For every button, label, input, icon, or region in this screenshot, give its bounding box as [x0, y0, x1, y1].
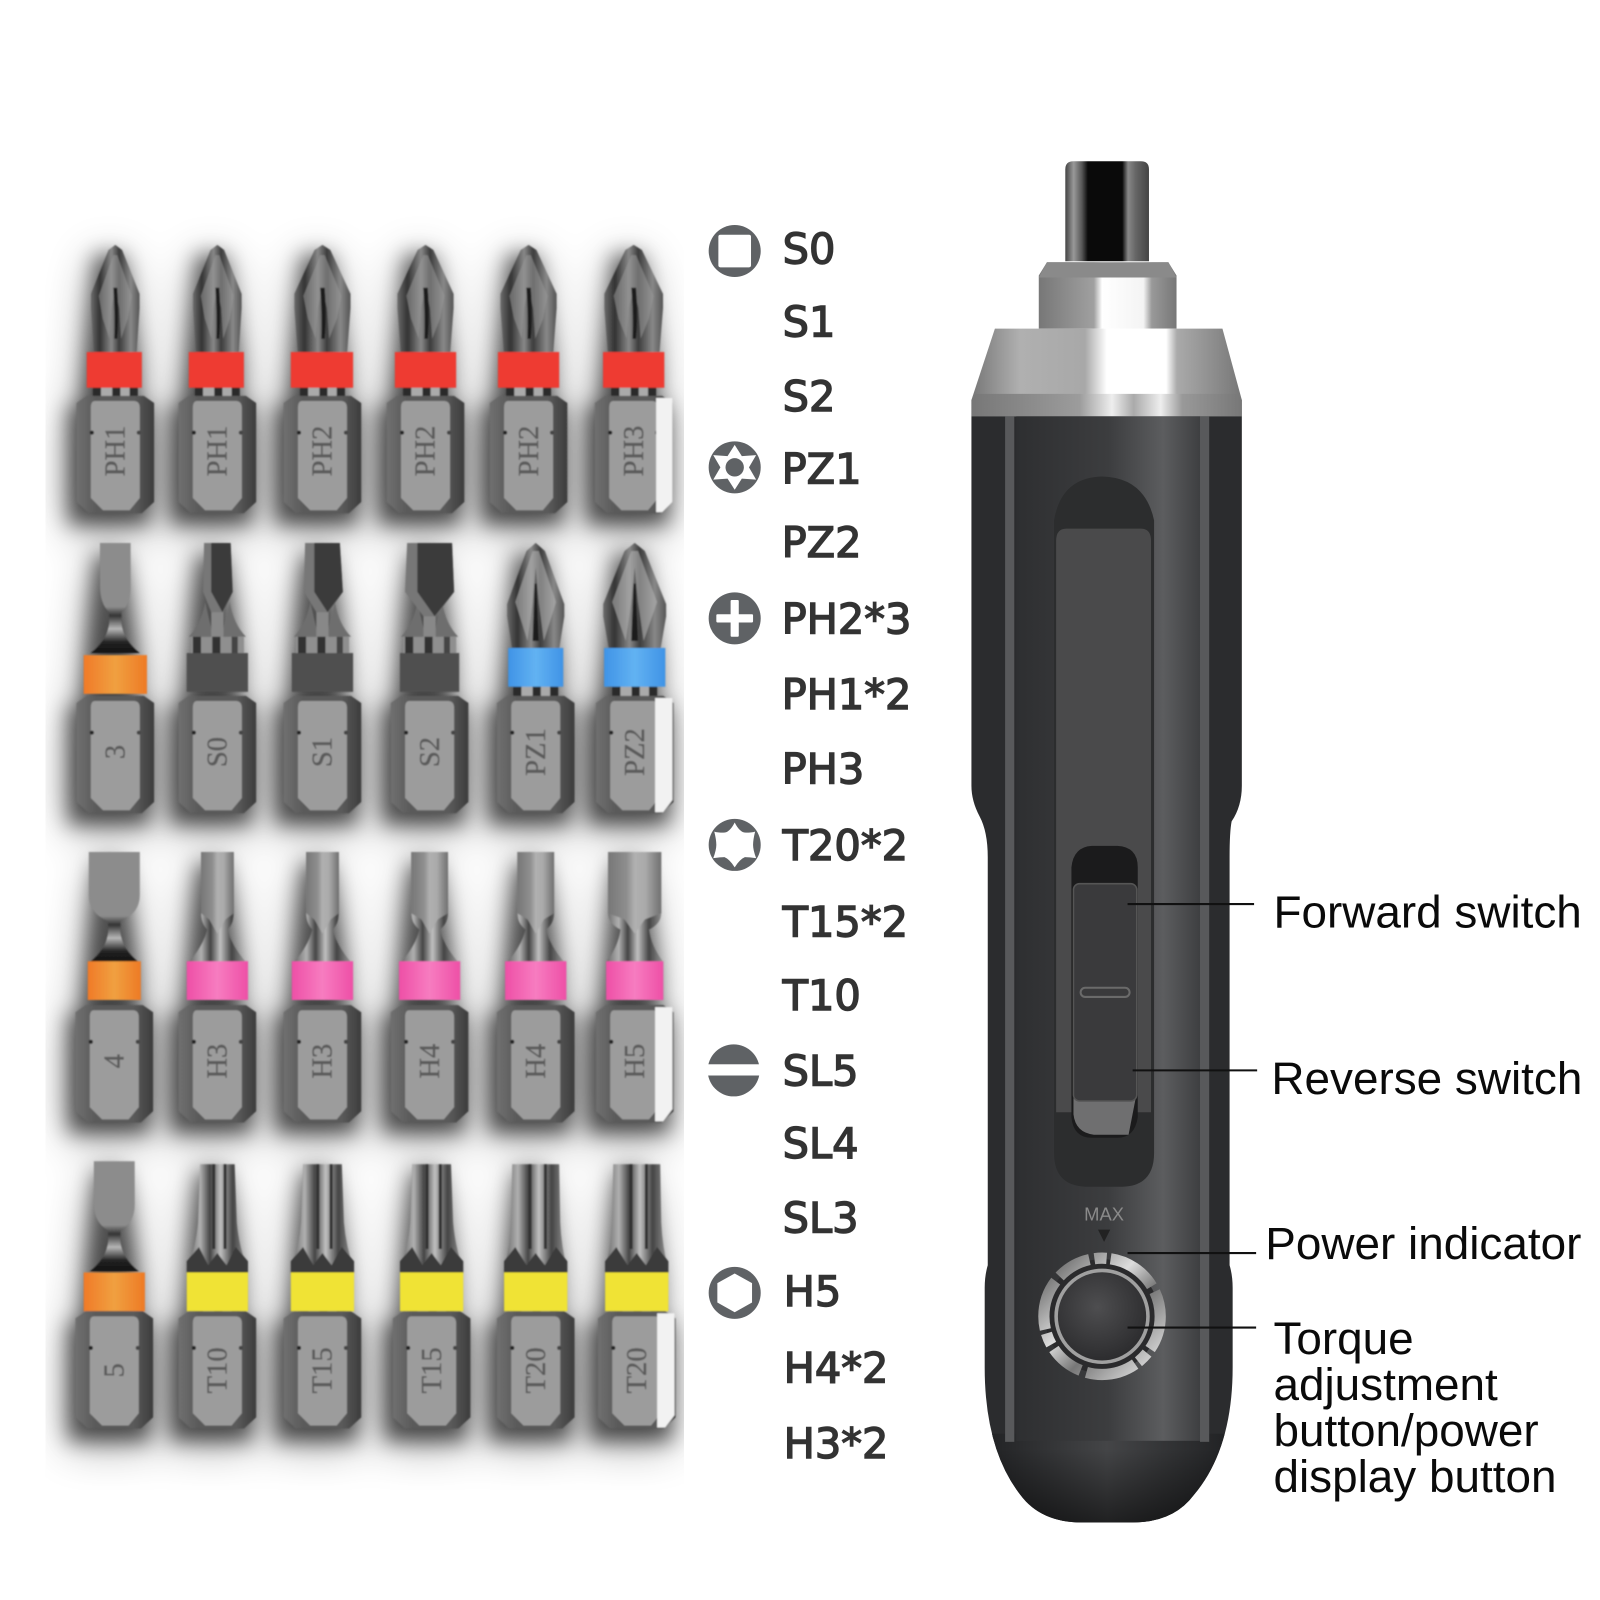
- label: torque adjustment: adjustment: [1273, 1358, 1498, 1410]
- bit H3: H3: [203, 1044, 234, 1079]
- bit PZ2: PZ2: [620, 728, 651, 776]
- bit S1: [284, 543, 361, 813]
- bit PZ1: [497, 543, 574, 813]
- legend: bit sizes: SL4: [783, 1119, 859, 1168]
- bit H4: [497, 852, 574, 1122]
- label: torque adjustment: display button: [1273, 1450, 1556, 1502]
- icon: torx: [709, 819, 761, 871]
- bit T20: T20: [622, 1347, 653, 1393]
- legend: bit sizes: PZ2: [782, 518, 862, 567]
- legend: bit sizes: PZ1: [782, 445, 862, 494]
- button ring: [1044, 1258, 1160, 1374]
- bit T20: [598, 1164, 676, 1429]
- label: torque adjustment: Torque: [1273, 1312, 1414, 1364]
- bit T15: [284, 1164, 361, 1429]
- bit PZ1: PZ1: [521, 728, 552, 776]
- bit slotted 4: 4: [99, 1054, 130, 1068]
- legend: bit sizes: H5: [784, 1267, 841, 1316]
- label: power indicator: Power indicator: [1265, 1217, 1581, 1269]
- legend: bit sizes: H3*2: [784, 1419, 888, 1468]
- bit H3: [179, 852, 256, 1122]
- legend: bit sizes: [782, 224, 911, 1468]
- bit H3: H3: [308, 1044, 339, 1079]
- legend: bit sizes: S2: [783, 372, 835, 421]
- bit PH2: PH2: [308, 426, 339, 476]
- window inner: [1056, 529, 1151, 1112]
- left rail: [1005, 416, 1014, 1442]
- collar: [1039, 262, 1177, 329]
- bit PH1: PH1: [203, 426, 234, 476]
- bit slotted 4: [76, 852, 153, 1122]
- icon: phillips: [709, 592, 761, 644]
- bit T10: [179, 1164, 256, 1429]
- label: forward switch: Forward switch: [1273, 886, 1582, 938]
- bit PH2: PH2: [411, 426, 442, 476]
- label: reverse switch: Reverse switch: [1271, 1052, 1582, 1104]
- bit PH2: PH2: [514, 426, 545, 476]
- right rail: [1200, 416, 1209, 1442]
- shaft: [1065, 161, 1149, 261]
- panel: bit set: [76, 245, 676, 1429]
- bit H4: H4: [415, 1044, 446, 1079]
- icon: slotted: [704, 1044, 763, 1096]
- base cap: [992, 1434, 1225, 1522]
- bit PH2: [490, 245, 567, 513]
- icon: hex: [709, 1267, 761, 1319]
- bit H4: [391, 852, 468, 1122]
- icon: square drive: [709, 225, 761, 277]
- legend: bit sizes: S1: [783, 298, 835, 347]
- bit PH3: [595, 245, 672, 513]
- slider mark: [1081, 988, 1130, 997]
- bit H5: H5: [620, 1044, 651, 1079]
- bit T20: T20: [521, 1347, 552, 1393]
- legend: bit sizes: T10: [782, 971, 861, 1020]
- bit PH1: PH1: [100, 426, 131, 476]
- bit slotted 5: [76, 1161, 153, 1429]
- center panel: [1016, 416, 1200, 1441]
- bit PH1: [77, 245, 154, 513]
- bit slotted 3: 3: [100, 745, 131, 759]
- recess highlight: [1073, 1098, 1136, 1135]
- bit T15: T15: [308, 1347, 339, 1393]
- bit PH2: [284, 245, 361, 513]
- bit shadows: [68, 255, 671, 1445]
- button: [1056, 1270, 1148, 1362]
- bit H3: [284, 852, 361, 1122]
- legend: bit sizes: PH3: [782, 745, 864, 794]
- bit S2: S2: [415, 737, 446, 767]
- body: [971, 416, 1242, 1522]
- legend: bit sizes: T20*2: [782, 821, 908, 870]
- bit PH1: [179, 245, 256, 513]
- legend: bit sizes: T15*2: [782, 898, 908, 947]
- MAX mark: [1084, 1203, 1124, 1242]
- bit T15: T15: [417, 1347, 448, 1393]
- leader lines: [1128, 904, 1257, 1328]
- label: torque adjustment: button/power: [1273, 1404, 1539, 1456]
- bit PH2: [387, 245, 464, 513]
- icon: pozidriv: [709, 441, 761, 493]
- bit S0: [179, 543, 256, 813]
- bit S2: [391, 543, 468, 813]
- legend: bit sizes: PH2*3: [782, 595, 911, 644]
- MAX mark: MAX: [1084, 1203, 1124, 1224]
- legend: bit sizes: S0: [783, 224, 835, 273]
- bit T20: [497, 1164, 574, 1429]
- legend: bit sizes: SL5: [783, 1047, 859, 1096]
- legend: bit sizes: SL3: [783, 1194, 859, 1243]
- silver cone: [971, 329, 1242, 416]
- bit H5: [596, 852, 673, 1122]
- bit S1: S1: [308, 737, 339, 767]
- legend: bit sizes: H4*2: [784, 1344, 888, 1393]
- slider: [1073, 884, 1137, 1101]
- switch recess: [1071, 846, 1138, 1138]
- bit T10: T10: [203, 1347, 234, 1393]
- bit slotted 5: 5: [99, 1363, 130, 1378]
- bit S0: S0: [203, 737, 234, 767]
- label: torque adjustment: [1273, 1312, 1556, 1502]
- bit PZ2: [596, 543, 673, 813]
- window: [1054, 477, 1154, 1187]
- bit H4: H4: [521, 1044, 552, 1079]
- legend: bit sizes: PH1*2: [782, 670, 911, 719]
- bit T15: [393, 1164, 470, 1429]
- bit PH3: PH3: [619, 426, 650, 476]
- screwdriver: [969, 161, 1245, 1526]
- bit slotted 3: [77, 543, 154, 813]
